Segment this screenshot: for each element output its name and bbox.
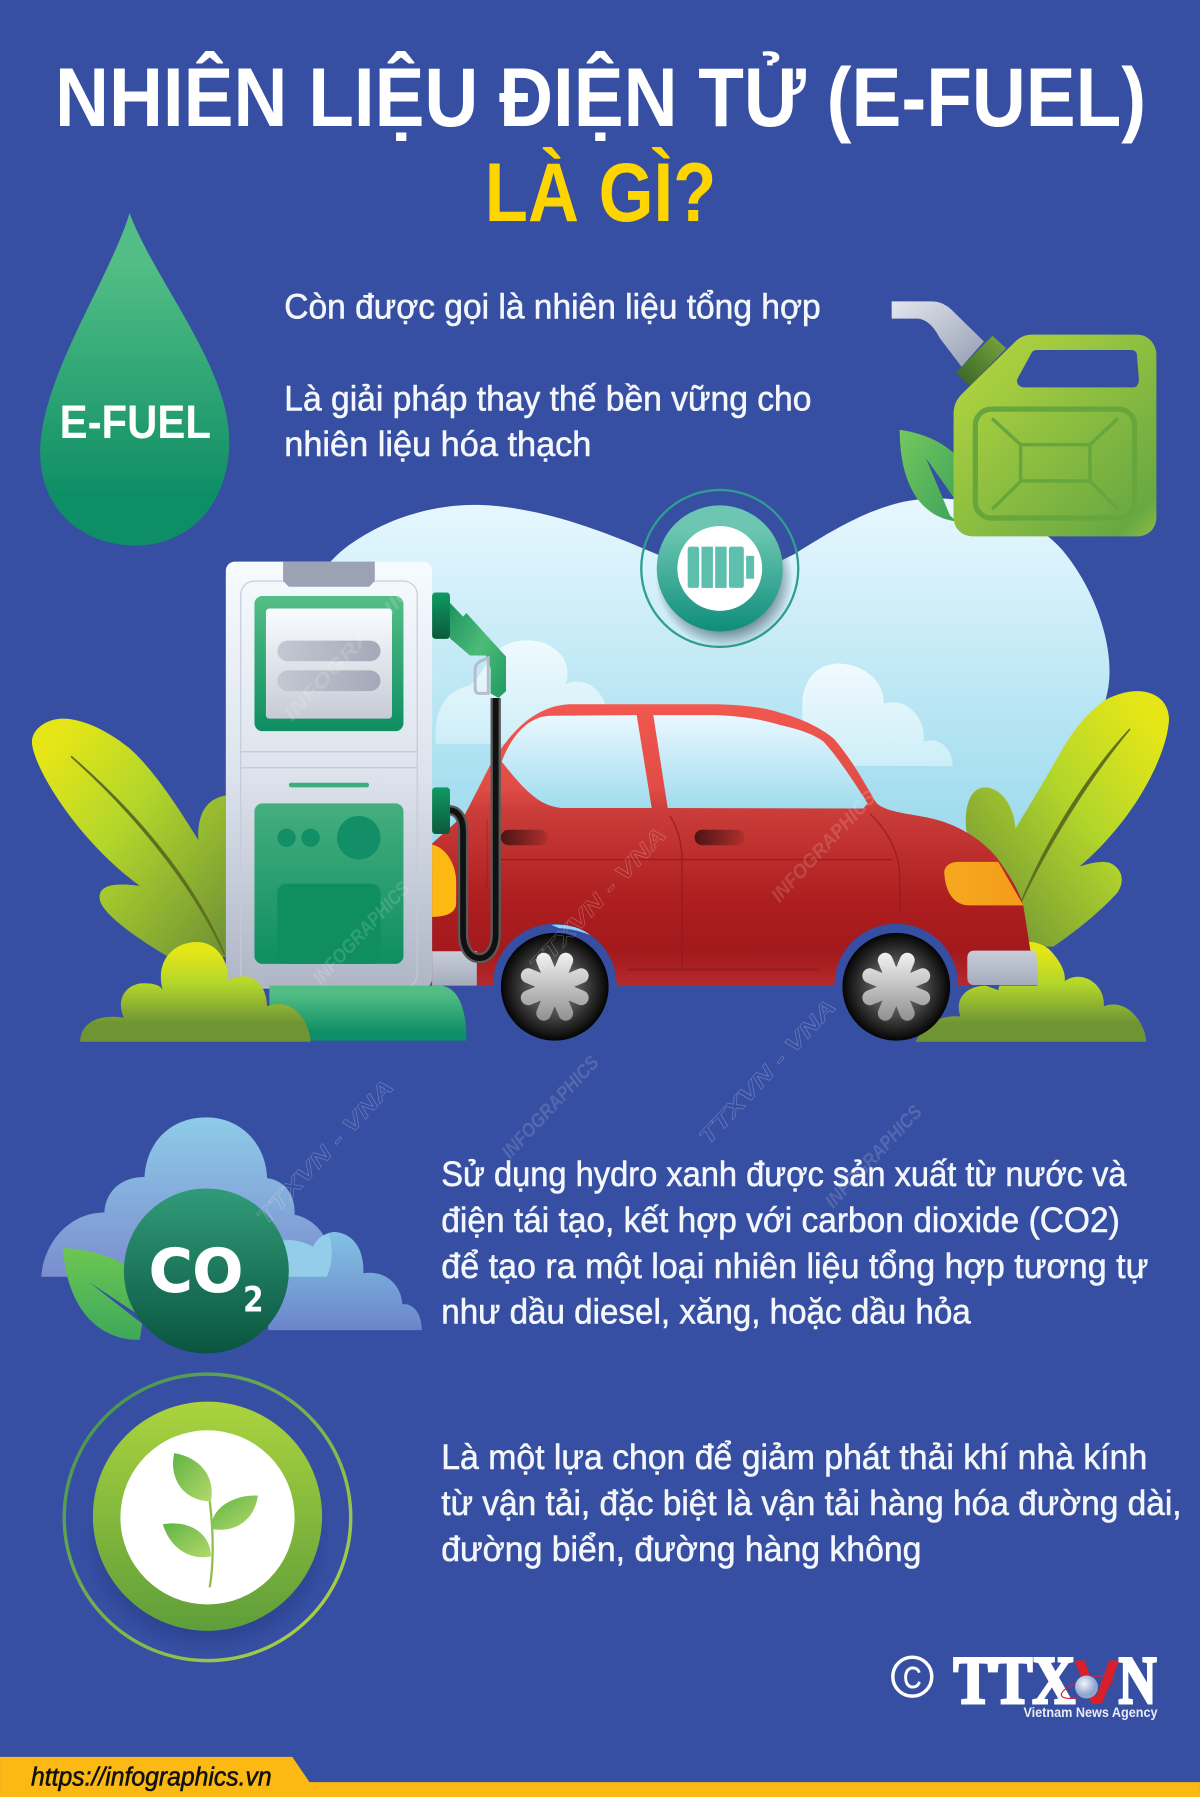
text block: intro [284,287,821,464]
text block: intro: nhiên liệu hóa thạch [284,424,591,464]
title [55,50,1146,239]
back cloud right [268,1232,422,1330]
logo: TTXVN: Vietnam News Agency [1023,1705,1158,1720]
logo: TTXVN [893,1643,1158,1720]
bush left [80,942,311,1042]
watermarks: INFOGRAPHICS [821,1101,927,1212]
pump top tab [283,562,375,587]
jerrycan [892,301,1156,536]
car lights [432,845,1023,917]
text block: benefit: Là một lựa chọn để giảm phát thải khí nhà kính [441,1437,1147,1477]
watermarks [251,568,927,1230]
plant: right leaves [966,691,1169,947]
watermarks: INFOGRAPHICS [309,878,414,989]
text block: how it is made: như dầu diesel, xăng, hoặc dầu hỏa [441,1292,971,1332]
wheel front [842,933,950,1041]
bush right [916,942,1146,1042]
icon: CO2 cloud [41,1117,422,1353]
scene background cloud [264,498,1110,871]
text block: how it is made: điện tái tạo, kết hợp với carbon dioxide (CO2) [441,1200,1120,1240]
watermarks: INFOGRAPHICS [280,568,429,725]
icon: green plant badge [64,1374,351,1661]
text block: benefit [441,1437,1182,1569]
icon: CO2 cloud: CO [149,1238,243,1307]
pump body [226,562,432,988]
title: LÀ GÌ? [485,145,716,239]
fuel pump [226,562,506,1041]
text block: how it is made: Sử dụng hydro xanh được sản xuất từ nước và [441,1154,1127,1194]
watermarks: TTXVN - VNA [524,822,671,978]
fuel nozzle [450,603,506,698]
watermarks: INFOGRAPHICS [767,787,881,906]
fuel hose [449,698,496,958]
pump screen [254,596,403,731]
text block: benefit: đường biển, đường hàng không [441,1529,921,1569]
leaf [63,1248,143,1340]
car body [432,704,1037,986]
text block: intro: Là giải pháp thay thế bền vững cho [284,378,811,418]
logo: TTXVN: N [1119,1643,1156,1718]
car details: door lines [487,814,900,970]
car [432,704,1038,1041]
logo: TTXVN: V [1074,1648,1120,1718]
CO2 badge [124,1188,289,1353]
car bumpers [432,951,1038,986]
icon: E-FUEL drop: E-FUEL [60,395,211,448]
pump side holders [432,593,450,834]
text block: intro: Còn được gọi là nhiên liệu tổng hợp [284,287,821,327]
small clouds [436,640,952,766]
jerrycan nozzle [892,301,984,367]
car door handles [501,830,744,845]
footer bar: https://infographics.vn [31,1762,272,1792]
jerrycan leaf [900,430,957,521]
wheel arches [493,924,958,986]
text block: how it is made: để tạo ra một loại nhiên liệu tổng hợp tương tự [441,1246,1148,1286]
icon: CO2 cloud: 2 [243,1281,264,1321]
pump lower panel [254,803,403,964]
pump base [269,986,466,1041]
logo: TTXVN: C [903,1660,921,1695]
footer bar [0,1757,1200,1797]
jerrycan body [954,335,1156,536]
watermarks: TTXVN - VNA [694,994,841,1149]
watermarks: TTXVN - VNA [251,1074,399,1230]
plant: left leaves [32,719,226,957]
jerrycan panel [975,409,1135,518]
back cloud left [41,1117,331,1277]
car windows [502,715,868,809]
logo: TTXVN: TTX [954,1643,1075,1718]
icon: E-FUEL drop [40,213,229,546]
text block: how it is made [441,1154,1148,1332]
plant sprout [163,1453,258,1587]
watermarks: INFOGRAPHICS [498,1052,604,1163]
wheel rear [501,933,609,1041]
jerrycan cap [956,336,1006,386]
battery icon [641,490,798,648]
